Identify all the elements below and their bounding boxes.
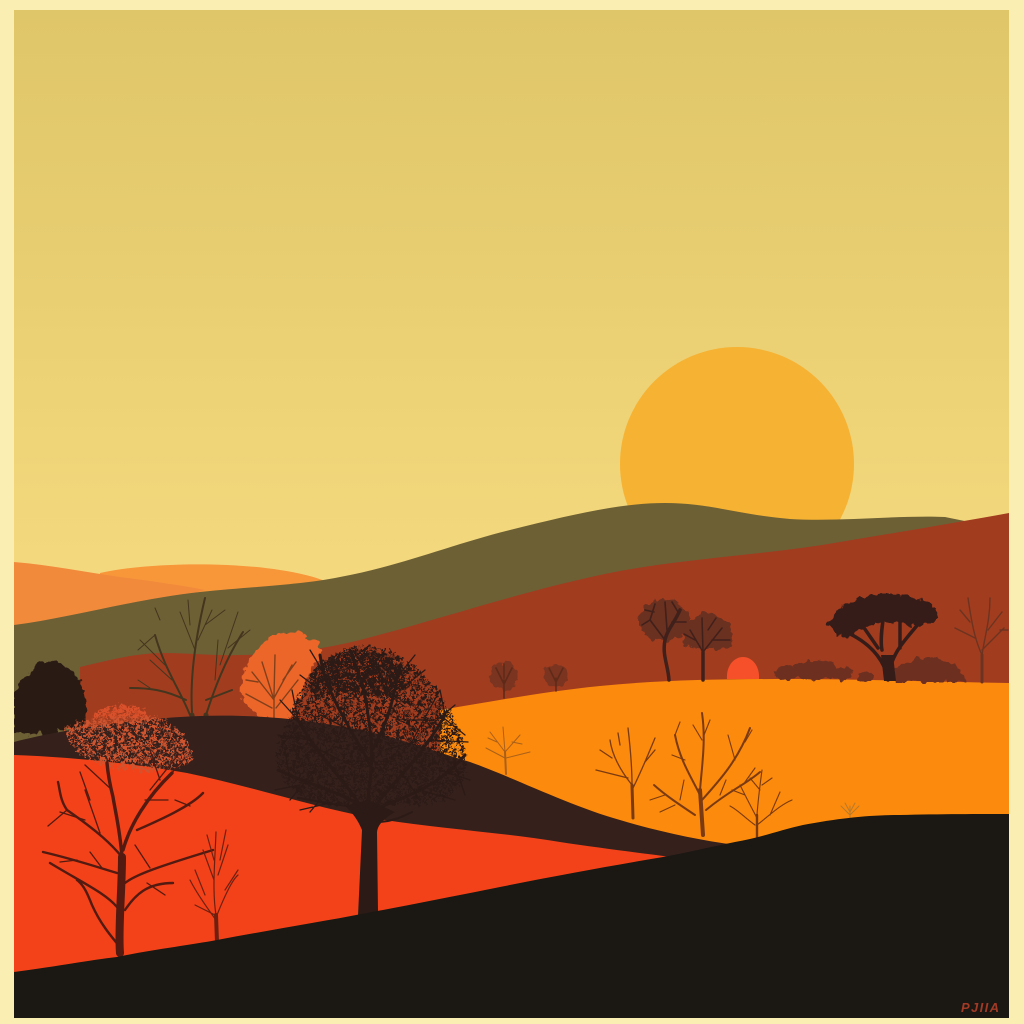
small round tree (490, 662, 518, 698)
red setting shape (727, 657, 759, 679)
right bush (893, 657, 966, 682)
trees on amber hill (486, 713, 859, 842)
dark brown hill (14, 716, 735, 870)
far orange hills (14, 562, 325, 640)
twin tree right (683, 613, 733, 680)
amber hill (440, 679, 1009, 860)
trunk (345, 800, 395, 916)
bare tree right (730, 770, 792, 842)
rust hill (80, 513, 1009, 860)
small round tree (544, 664, 568, 691)
dark left tree (14, 660, 87, 752)
sky (14, 10, 1009, 810)
olive hill (14, 503, 1009, 800)
right margin mask (1009, 0, 1024, 1024)
orange tree behind hill (240, 632, 322, 718)
crown speckle (276, 646, 466, 805)
bare tree (596, 728, 655, 818)
large bare tree on red hill (43, 750, 213, 953)
small tree left (486, 727, 530, 774)
red hill (14, 755, 672, 1000)
signature: PJIIA (961, 1000, 999, 1015)
small bare tree on red hill (190, 830, 238, 942)
umbrella tree (828, 594, 938, 681)
pink bare tree crown (64, 704, 193, 771)
bare olive tree (130, 598, 250, 775)
distant trees on rust hill (490, 594, 1008, 698)
limbs and twigs (275, 645, 470, 822)
large bare tree (650, 713, 760, 835)
twin tree left (639, 599, 689, 680)
bottom margin mask (0, 1018, 1024, 1024)
crown dense clusters (310, 651, 406, 700)
black foreground hill (14, 814, 1009, 1018)
sun (620, 347, 854, 581)
tiny pale tree (841, 803, 859, 823)
bare tree far right (955, 598, 1008, 682)
large foreground tree (275, 645, 470, 916)
distant bushes (775, 660, 876, 682)
left margin mask (0, 0, 14, 1024)
